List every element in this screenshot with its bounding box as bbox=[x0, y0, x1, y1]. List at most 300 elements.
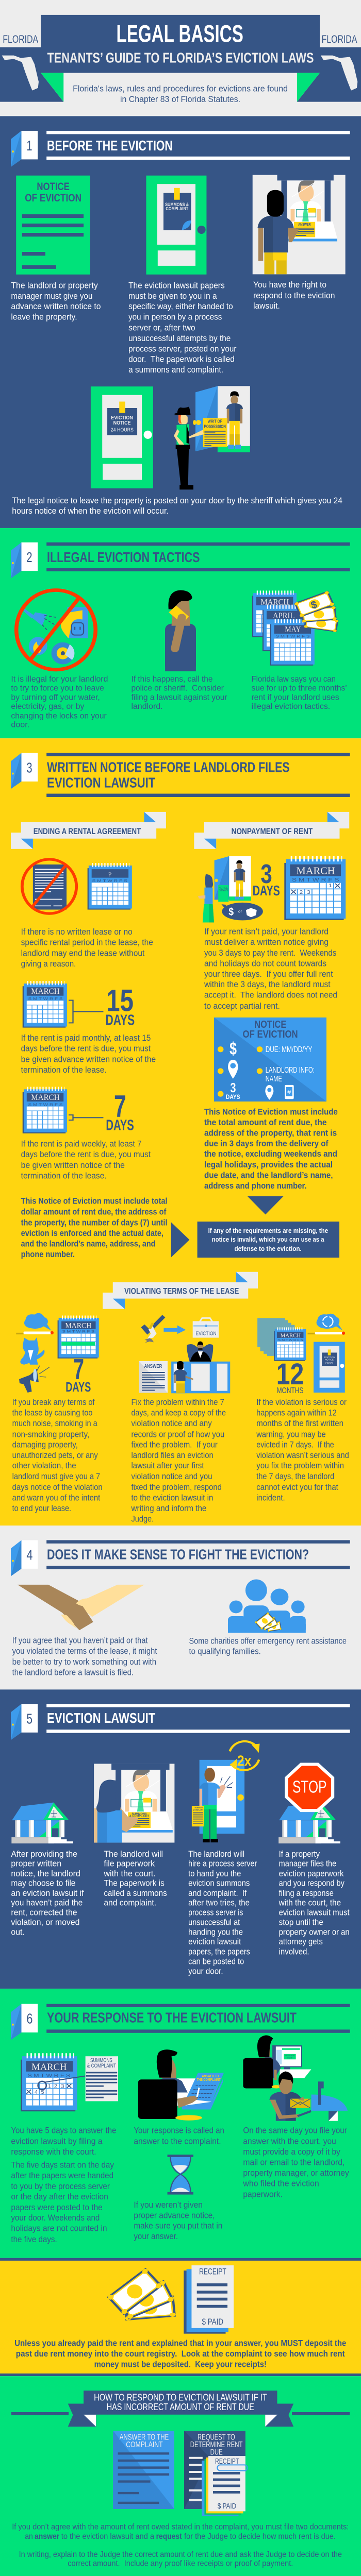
text: work with landlord: the landlord before a lawsuit is filed. bbox=[12, 1667, 134, 1677]
illustration: process server at door bbox=[192, 1741, 260, 1842]
text: proper advance notice: If you weren’t given bbox=[134, 2200, 203, 2210]
icon: courthouse bbox=[11, 1803, 73, 1843]
text: work with landlord bbox=[12, 1635, 157, 1677]
panel: section 2 illegal eviction tactics bbox=[0, 528, 361, 738]
icon: March calendar with weekend marked: 1 bbox=[329, 883, 332, 889]
text: break terms of lease: much noise, smoking in a bbox=[12, 1418, 97, 1428]
text: explain in writing: correct amount. Include any proof like receipts or proof of payment. bbox=[68, 2558, 293, 2568]
text: rent not paid: to accept partial rent. bbox=[204, 1001, 280, 1011]
callout: invalid notice bbox=[198, 1222, 339, 1258]
icon: receipt bbox=[184, 2265, 234, 2334]
text: advance notice: leave the property. bbox=[11, 312, 77, 322]
illustration: mailing and emailing copy bbox=[243, 2035, 348, 2121]
text: provide a copy: paperwork. bbox=[243, 2189, 283, 2199]
icon: charity family with money bbox=[228, 1579, 306, 1633]
graphic: notice of eviction card: # bbox=[287, 1090, 291, 1095]
section heading 1: BEFORE THE EVICTION bbox=[47, 138, 173, 154]
section heading 5: 5 bbox=[26, 1711, 32, 1727]
text: 5 days to answer: or the day after the eviction bbox=[11, 2192, 108, 2201]
text: property manager: and you respond by bbox=[279, 1878, 344, 1888]
heading: Florida left: FLORIDA bbox=[3, 32, 39, 45]
text: two documents: request bbox=[156, 2532, 182, 2541]
ribbon: violating terms of the lease bbox=[103, 1272, 258, 1309]
text: proper advance notice: make sure you put that in bbox=[134, 2221, 222, 2230]
text: landlord may file: rent, corrected the bbox=[11, 1907, 77, 1917]
icon: 12 months calendar stack: S M T W R F S bbox=[278, 1339, 303, 1342]
illustration: mailing and emailing copy: MESSAGE bbox=[285, 2054, 295, 2057]
text: file paperwork: and complaint. bbox=[104, 1898, 156, 1907]
graphic: 5 day calendar and summons: 5 bbox=[41, 2089, 44, 2095]
text: fix the problem: violation notice and any bbox=[131, 1418, 212, 1428]
text: break terms of lease: If you break any terms of bbox=[12, 1397, 95, 1407]
text: break terms of lease: other violation, the bbox=[12, 1461, 76, 1470]
icon: calendars and money: S M T W R F S bbox=[275, 634, 309, 638]
text: monthly rent: If the rent is paid monthly, at least 15 bbox=[21, 1033, 151, 1043]
illustration: writing the answer bbox=[138, 2049, 224, 2121]
text: process server: The landlord will bbox=[188, 1849, 244, 1859]
text: notice must include (left) bbox=[21, 1196, 168, 1259]
illustration: answer and judge bbox=[139, 1342, 230, 1393]
text: landlord may file: proper written bbox=[11, 1859, 61, 1869]
text: illegal tactics: changing the locks on your bbox=[11, 711, 107, 720]
graphic: 7 days calendar: 7 bbox=[114, 1089, 126, 1124]
text: 5 days to answer: after the papers were handed bbox=[11, 2171, 113, 2180]
illustration: door with 24-hour eviction notice: NOTICE bbox=[113, 420, 131, 426]
ribbon: nonpayment of rent: NONPAYMENT OF RENT bbox=[232, 826, 313, 836]
graphic: 15 days calendar: S M T W R F S bbox=[28, 997, 62, 1001]
icon: request to determine rent with receipt: DUE bbox=[210, 2447, 223, 2456]
text: proper advance notice: proper advance notice, bbox=[134, 2210, 215, 2220]
graphic: 5 day calendar and summons: 1 bbox=[48, 2083, 51, 2090]
illustration: 3 days notice: $ bbox=[228, 906, 234, 918]
graphic: 15 days calendar bbox=[23, 983, 135, 1028]
text: provide a copy: mail or email to the landlord, bbox=[243, 2157, 344, 2167]
text: monthly rent: termination of the lease. bbox=[21, 1065, 107, 1075]
text: lawsuit papers: specific way, either handed to bbox=[128, 301, 233, 311]
ribbon: ending a rental agreement bbox=[11, 812, 166, 849]
illustration: 3 days notice: DAYS bbox=[253, 884, 280, 899]
illustration: door with summons bbox=[146, 176, 206, 275]
illustration: 3 days notice: 3 DAYS bbox=[219, 889, 228, 892]
text: 5 days to answer: holidays are not counted in bbox=[11, 2224, 107, 2233]
text: fix the problem: Judge. bbox=[131, 1514, 154, 1523]
illustration: 3 days notice bbox=[198, 856, 280, 923]
text: break terms of lease: and warn you of the intent bbox=[12, 1493, 100, 1502]
text: process server: and complaint. If bbox=[188, 1888, 247, 1898]
graphic: 5 day calendar and summons: & COMPLAINT bbox=[87, 2062, 116, 2069]
section heading 6 bbox=[11, 2004, 350, 2040]
text: weekly rent: days before the rent is due, you must bbox=[21, 1149, 151, 1159]
text: break terms of lease: unauthorized pets, or any bbox=[12, 1450, 98, 1460]
panel: section 1 before the eviction bbox=[0, 116, 361, 528]
text: property manager: with the court, the bbox=[278, 1898, 341, 1907]
illustration: landlord filing with clerk bbox=[94, 1764, 174, 1843]
text: explain in writing bbox=[19, 2550, 342, 2568]
text: break terms of lease: the lease by causing too bbox=[12, 1408, 93, 1417]
text: property manager: If a property bbox=[279, 1849, 320, 1859]
text: rent not paid: If your rent isn’t paid, your landlord bbox=[204, 927, 329, 937]
text: property manager: filing a response bbox=[279, 1888, 334, 1898]
section heading 1: 1 bbox=[26, 138, 32, 154]
icon: receipt: RECEIPT bbox=[199, 2267, 226, 2277]
graphic: notice of eviction card: LANDLORD INFO: bbox=[266, 1066, 315, 1075]
panel: section 4 does it make sense bbox=[0, 1526, 361, 1689]
icon: calendar unknown month: S M T W R F S bbox=[92, 878, 127, 883]
graphic: 7 days calendar: MARCH bbox=[31, 1094, 60, 1102]
arrow: right bbox=[171, 1222, 189, 1258]
text: provide a copy: answer with the court, you bbox=[243, 2136, 336, 2146]
text: provide a copy: who filed the eviction bbox=[243, 2178, 319, 2188]
graphic: 5 day calendar and summons: 3 bbox=[61, 2083, 64, 2090]
text: rent not paid: your three days. If you offer full rent bbox=[204, 969, 333, 979]
text: fix the problem: days, and keep a copy of the bbox=[131, 1408, 226, 1417]
text: right to respond: respond to the eviction bbox=[253, 291, 335, 300]
text: landlord may file: violation, or moved bbox=[11, 1917, 79, 1927]
illustration: door with 24-hour eviction notice: 24 HOURS bbox=[111, 427, 134, 433]
icon: 12 months calendar stack: MONTHS bbox=[277, 1386, 304, 1395]
intro text: in Chapter 83 of Florida Statutes. bbox=[120, 94, 240, 104]
text: fix the problem: fixed the problem. If your bbox=[131, 1439, 218, 1449]
illustration: answer and judge: ANSWER bbox=[144, 1364, 162, 1369]
icon: 7 days violation calendar: DAYS bbox=[65, 1379, 91, 1395]
icon: March calendar with weekend marked: S M T W R F S bbox=[292, 877, 339, 883]
text: property manager: manager files the bbox=[279, 1859, 336, 1869]
graphic: 7 days calendar bbox=[23, 1089, 134, 1133]
text: rent not paid: and holidays do not count towards bbox=[204, 959, 326, 968]
section heading 5 bbox=[11, 1704, 350, 1740]
icon: calendars and money bbox=[252, 591, 339, 666]
text: proper advance notice: your answer. bbox=[134, 2231, 178, 2241]
illustration: 3 days notice: 3 bbox=[260, 859, 272, 889]
text: process server: can be posted to bbox=[188, 1956, 244, 1966]
icon: tenant on phone bbox=[165, 590, 196, 671]
section heading 2: 2 bbox=[26, 549, 32, 566]
text: file paperwork: with the court. bbox=[103, 1869, 156, 1878]
text: 5 days to answer: eviction lawsuit by filing a bbox=[11, 2136, 103, 2146]
text: landlord may file bbox=[11, 1849, 84, 1937]
text: illegal tactics: electricity, gas, or by bbox=[11, 702, 85, 711]
icon: 12 months calendar stack bbox=[257, 1318, 306, 1395]
icon: calendars and money: MAY bbox=[285, 625, 301, 634]
text: two documents: to the eviction lawsuit and a bbox=[61, 2532, 155, 2541]
text: process server: eviction lawsuit bbox=[188, 1937, 241, 1946]
text: notice must include (right) bbox=[204, 1107, 338, 1191]
text: charities bbox=[189, 1636, 347, 1656]
text: answer to the complaint: Your response is called an bbox=[134, 2126, 224, 2135]
section heading 6: 6 bbox=[26, 2011, 32, 2027]
icon: March calendar with weekend marked: MARCH bbox=[297, 865, 335, 876]
text: notice must include (right): address and phone number. bbox=[204, 1181, 307, 1191]
illustration: notice of eviction document: NOTICE bbox=[37, 180, 70, 193]
text: notice must include (right): due date, and the landlord’s name, bbox=[204, 1171, 333, 1180]
text: landlord may file: you haven’t paid the bbox=[11, 1898, 83, 1907]
ribbon: ending a rental agreement: ENDING A RENTAL AGREEMENT bbox=[34, 826, 141, 836]
text: answer to the complaint: answer to the complaint. bbox=[134, 2136, 221, 2146]
text: break terms of lease: days notice of the violation bbox=[12, 1482, 103, 1492]
text: advance notice bbox=[11, 280, 101, 322]
section heading 3: 3 bbox=[26, 760, 32, 776]
icon: calendar unknown month bbox=[88, 865, 132, 910]
section heading 4 bbox=[11, 1540, 350, 1576]
callout: invalid notice: defense to the eviction. bbox=[234, 1245, 302, 1252]
graphic: 15 days calendar: 15 bbox=[106, 984, 134, 1018]
graphic: notice of eviction card bbox=[214, 1018, 326, 1101]
text: work with landlord: If you agree that you haven’t paid or that bbox=[12, 1635, 148, 1645]
text: fix the problem: fixed the problem, respond bbox=[131, 1482, 222, 1492]
text: weekly rent: termination of the lease. bbox=[21, 1171, 107, 1180]
text: weekly rent: If the rent is paid weekly, at least 7 bbox=[21, 1139, 142, 1148]
text: process server: handing you the bbox=[188, 1927, 243, 1937]
text: 5 days to answer: papers were posted to the bbox=[11, 2202, 103, 2212]
text: 5 days to answer: the five days. bbox=[11, 2234, 57, 2244]
intro text bbox=[73, 83, 288, 104]
text: three months rent bbox=[252, 674, 347, 711]
text: serious violation bbox=[256, 1397, 349, 1502]
title: LEGAL BASICS bbox=[116, 20, 243, 47]
text: no written lease: giving a reason. bbox=[21, 959, 76, 969]
text: 5 days to answer: to you by the process server bbox=[11, 2181, 110, 2191]
text: weekly rent: be given written notice of the bbox=[21, 1160, 125, 1170]
text: must deposit rent bbox=[14, 2338, 346, 2369]
text: rent not paid: within the 3 days, the landlord must bbox=[204, 979, 331, 989]
icon: money bbox=[107, 2268, 176, 2320]
text: right to respond: You have the right to bbox=[253, 280, 326, 290]
text: call the police: landlord. bbox=[131, 702, 163, 711]
graphic: 5 day calendar and summons bbox=[21, 2056, 118, 2111]
icon: 7 days violation calendar bbox=[58, 1317, 99, 1395]
text: advance notice: advance written notice to bbox=[11, 301, 101, 311]
graphic: notice of eviction card: $ bbox=[229, 1039, 237, 1058]
text: 5 days to answer: You have 5 days to answer the bbox=[11, 2126, 117, 2135]
icon: 12 months calendar stack: MARCH bbox=[281, 1333, 301, 1339]
icon: calendars and money: APRIL bbox=[273, 612, 294, 620]
graphic: notice of eviction card: 3 bbox=[230, 1080, 236, 1095]
text: no written lease: If there is no written lease or no bbox=[21, 927, 133, 937]
text: file paperwork: called a summons bbox=[104, 1888, 167, 1898]
text: serious violation: evicted in 7 days. If the bbox=[256, 1439, 334, 1449]
illustration: process server at door: SUMMONS bbox=[194, 1806, 203, 1809]
text: three months rent: sue for up to three months’ bbox=[252, 683, 347, 692]
text: fix the problem: records or proof of how you bbox=[131, 1429, 224, 1439]
text: two documents: an bbox=[25, 2532, 33, 2541]
illustration: 3 days notice: NOTICE bbox=[219, 887, 228, 890]
graphic: notice of eviction card: NAME bbox=[266, 1075, 282, 1083]
illustration: sheriff serving writ of possession bbox=[174, 386, 250, 489]
icon: Florida map left bbox=[2, 56, 39, 91]
text: notice must include (right): due in 3 days from the delivery of bbox=[204, 1139, 329, 1148]
text: rent not paid: accept it. The landlord does not need bbox=[204, 990, 337, 1000]
ribbon: nonpayment of rent bbox=[194, 812, 349, 849]
text: advance notice: The landlord or property bbox=[11, 280, 98, 290]
text: must deposit rent: money must be deposited. Keep your receipts! bbox=[94, 2360, 267, 2369]
icon: repeat smoking and door bbox=[307, 1314, 345, 1393]
text: process server: your door. bbox=[188, 1967, 223, 1976]
illustration: door with 24-hour eviction notice bbox=[91, 386, 153, 488]
text: landlord may file: an eviction lawsuit if bbox=[11, 1888, 84, 1898]
illustration: 3 days notice: or bbox=[238, 909, 242, 913]
text: notice must include (right): the total amount of rent due, the bbox=[204, 1117, 327, 1127]
text: fix the problem: violation notice and you bbox=[131, 1471, 212, 1481]
panel: how to respond if incorrect amount bbox=[0, 2376, 361, 2576]
banner: how to respond bbox=[11, 2391, 350, 2427]
graphic: notice of eviction card: DAYS bbox=[226, 1093, 240, 1100]
text: property manager: stop until the bbox=[279, 1917, 323, 1927]
section heading 2: ILLEGAL EVICTION TACTICS bbox=[47, 550, 200, 566]
text: break terms of lease: damaging property, bbox=[12, 1439, 78, 1449]
text: process server: hire a process server bbox=[188, 1859, 257, 1869]
illustration: writing the answer: THE COMPLAINT bbox=[197, 2077, 221, 2082]
text: lawsuit papers: door. The paperwork is called bbox=[128, 354, 235, 364]
ribbon: violating terms of the lease: VIOLATING TERMS OF THE LEASE bbox=[124, 1286, 239, 1296]
graphic: 5 day calendar and summons: S M T W R F S bbox=[28, 2073, 70, 2079]
icon: request to determine rent with receipt: RECEIPT bbox=[215, 2458, 239, 2466]
text: landlord may file: out. bbox=[11, 1927, 25, 1937]
text: property manager: attorney gets bbox=[279, 1937, 323, 1946]
icon: handshake bbox=[18, 1585, 144, 1630]
text: 5 days to answer: The five days start on the day bbox=[11, 2160, 114, 2170]
icon: 7 days violation calendar: 7 bbox=[73, 1353, 84, 1385]
icon: answer to the complaint document: COMPLAINT bbox=[126, 2440, 163, 2449]
illustration: landlord filing with clerk: & COMPLAINT bbox=[129, 1815, 150, 1818]
text: process server: papers, the papers bbox=[188, 1946, 250, 1956]
icon: 7 days violation calendar: S M T W R F S bbox=[62, 1329, 94, 1333]
arrow: down bbox=[248, 1196, 284, 1214]
text: two documents bbox=[12, 2522, 349, 2541]
text: lawsuit papers: process server, posted on your bbox=[128, 344, 237, 353]
section heading 2 bbox=[11, 543, 350, 579]
text: work with landlord: be better to try to work something out with bbox=[12, 1657, 156, 1667]
text: serious violation: happens again within 12 bbox=[256, 1408, 337, 1417]
icon: request to determine rent with receipt: DETERMINE RENT bbox=[190, 2440, 243, 2449]
text: rent not paid: must deliver a written notice giving bbox=[204, 937, 329, 947]
text: call the police: If this happens, call the bbox=[131, 674, 213, 684]
icon: repeat smoking and door: 7 DAYS bbox=[325, 1362, 334, 1365]
text: file paperwork bbox=[103, 1849, 167, 1907]
section heading 3: EVICTION LAWSUIT bbox=[47, 775, 156, 791]
text: serious violation: incident. bbox=[256, 1493, 285, 1502]
text: 5 days to answer: response with the court. bbox=[11, 2147, 96, 2157]
text: landlord may file: may choose to file bbox=[11, 1878, 75, 1888]
text: break terms of lease: non-smoking property, bbox=[12, 1429, 89, 1439]
text: file paperwork: file paperwork bbox=[104, 1859, 155, 1869]
icon: 7 days violation calendar: MARCH bbox=[65, 1321, 91, 1330]
icon: repeat smoking and door: EVICTION bbox=[324, 1356, 335, 1359]
illustration: tenant at clerk window: ANSWER bbox=[298, 222, 311, 227]
text: break terms of lease: to end your lease. bbox=[12, 1503, 71, 1513]
icon: calendars and money: MARCH bbox=[260, 598, 289, 606]
text: fix the problem: writing and inform the bbox=[131, 1503, 207, 1513]
text: lawsuit papers: you in person by a process bbox=[128, 312, 222, 322]
icon: hourglass bbox=[168, 2155, 193, 2195]
illustration: sheriff serving writ of possession: WRIT OF bbox=[208, 419, 222, 423]
text: three months rent: rent if your landlord uses bbox=[252, 692, 339, 702]
icon: 12 months calendar stack: 12 bbox=[276, 1358, 304, 1391]
text: serious violation: the 7 days, the landlord bbox=[256, 1471, 334, 1481]
text: charities: to qualifying families. bbox=[189, 1646, 261, 1656]
icon: March calendar with weekend marked bbox=[284, 859, 346, 920]
section heading 1 bbox=[11, 131, 350, 167]
illustration: writing the answer: ANSWER TO bbox=[202, 2074, 219, 2078]
graphic: notice of eviction card: NOTICE bbox=[254, 1019, 286, 1030]
text: illegal tactics: door. bbox=[11, 720, 29, 729]
graphic: 15 days calendar: MARCH bbox=[31, 988, 60, 996]
text: process server bbox=[188, 1849, 257, 1976]
text: notice must include (left): the property, the number of days (7) until bbox=[21, 1217, 168, 1227]
icon: courthouse with stop sign bbox=[278, 1762, 340, 1843]
icon: receipt: $ PAID bbox=[202, 2317, 223, 2327]
graphic: 5 day calendar and summons: MARCH bbox=[31, 2062, 67, 2073]
text: call the police: police or sheriff. Consider bbox=[131, 683, 224, 692]
illustration: mailing and emailing copy: SENT bbox=[287, 2057, 292, 2059]
panel: section 5 eviction lawsuit bbox=[0, 1689, 361, 1989]
text: two documents: answer bbox=[35, 2532, 60, 2541]
illustration: sheriff serving writ of possession: POSSESSION bbox=[204, 424, 226, 429]
text: notice must include (left): eviction is enforced and the actual date, bbox=[21, 1228, 163, 1238]
text: 5 days to answer bbox=[11, 2126, 117, 2244]
graphic: 5 day calendar and summons: 4 bbox=[35, 2089, 38, 2095]
text: file paperwork: The paperwork is bbox=[104, 1878, 165, 1888]
text: advance notice: manager must give you bbox=[11, 291, 92, 301]
text: notice must include (right): legal holidays, provides the actual bbox=[204, 1160, 333, 1170]
text: right to respond bbox=[253, 280, 335, 311]
text: file paperwork: The landlord will bbox=[104, 1849, 163, 1859]
text: landlord may file: After providing the bbox=[11, 1849, 77, 1859]
text: rent not paid bbox=[204, 927, 337, 1011]
text: process server: after two tries, the bbox=[188, 1898, 250, 1907]
text: property manager bbox=[278, 1849, 350, 1956]
illustration: notice of eviction document bbox=[16, 176, 90, 275]
text: illegal tactics: to try to force you to leave bbox=[11, 683, 104, 692]
text: fix the problem: lawsuit after your first bbox=[131, 1461, 204, 1470]
text: property manager: involved. bbox=[279, 1946, 309, 1956]
graphic: notice of eviction card: DUE: MM/DD/YY bbox=[266, 1045, 313, 1054]
text: monthly rent bbox=[21, 1033, 156, 1075]
text: three months rent: Florida law says you can bbox=[252, 674, 336, 684]
text: landlord may file: notice, the landlord bbox=[11, 1869, 80, 1878]
icon: March calendar with weekend marked: 2 bbox=[300, 889, 303, 895]
text: lawsuit papers bbox=[128, 280, 237, 375]
panel: section 3 written notice bbox=[0, 738, 361, 1526]
illustration: door with summons: COMPLAINT bbox=[166, 207, 188, 211]
text: call the police bbox=[131, 674, 227, 711]
text: provide a copy: must provide a copy of it by bbox=[243, 2147, 340, 2157]
text: process server: eviction summons bbox=[188, 1878, 250, 1888]
icon: answer to the complaint document bbox=[113, 2431, 174, 2509]
text: monthly rent: days before the rent is due, you must bbox=[21, 1043, 151, 1053]
callout: invalid notice: notice is invalid, which you can use as a bbox=[212, 1235, 324, 1243]
text: fix the problem bbox=[131, 1397, 226, 1523]
text: fix the problem: landlord files an eviction bbox=[131, 1450, 214, 1460]
icon: request to determine rent with receipt: REQUEST TO bbox=[198, 2432, 235, 2442]
icons: fix the problem bbox=[141, 1315, 219, 1343]
text: lawsuit papers: unsuccessful attempts by the bbox=[128, 333, 231, 343]
illustration: landlord filing with clerk: SUMMONS bbox=[132, 1813, 147, 1816]
graphic: notice of eviction card: OF EVICTION bbox=[243, 1029, 298, 1040]
text: three months rent: illegal eviction tactics. bbox=[252, 702, 330, 711]
graphic: 15 days calendar: DAYS bbox=[105, 1012, 135, 1028]
text: illegal tactics bbox=[11, 674, 108, 729]
text: lawsuit papers: server or, after two bbox=[128, 323, 195, 332]
icon: no written lease bbox=[22, 859, 76, 913]
text: break terms of lease: landlord must give you a 7 bbox=[12, 1471, 100, 1481]
text: weekly rent bbox=[21, 1139, 151, 1180]
text: break terms of lease bbox=[12, 1397, 103, 1513]
icon: March calendar with weekend marked: 3 bbox=[307, 889, 310, 895]
text: right to respond: lawsuit. bbox=[253, 301, 280, 311]
illustration: process server at door: 2x bbox=[237, 1753, 251, 1769]
text: notice must include (left): dollar amount of rent due, the address of bbox=[21, 1207, 166, 1216]
illustration: door with 24-hour eviction notice: EVICTION bbox=[111, 415, 133, 421]
